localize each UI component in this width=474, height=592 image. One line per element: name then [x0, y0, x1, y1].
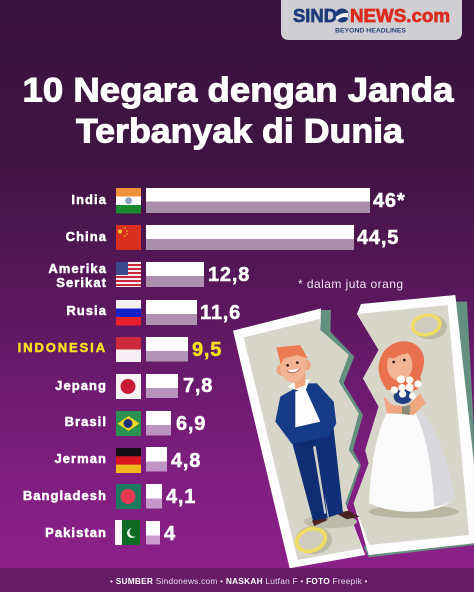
groom: [275, 345, 360, 528]
row: Amerika Serikat: Serikat: [56, 275, 107, 290]
row: Pakistan: 4: [164, 523, 176, 545]
bride: [369, 341, 459, 518]
footer credits: • SUMBER Sindonews.com • NASKAH Lutfan F • FOTO Freepik •: [110, 576, 368, 586]
flag: Russia: [116, 300, 141, 326]
row: China: [66, 225, 399, 250]
row: China: China: [66, 229, 107, 244]
footer band: [0, 568, 474, 592]
flag: Japan: [116, 374, 141, 399]
ring: top right: [409, 311, 447, 339]
row: Brasil: 6,9: [176, 413, 206, 435]
row: Jepang: Jepang: [55, 378, 107, 393]
left photo shadow: [320, 310, 363, 523]
flag: USA: [116, 262, 141, 287]
row: India: [71, 188, 405, 214]
row: Bangladesh: 4,1: [166, 486, 196, 508]
row: Jerman: 4,8: [171, 450, 201, 472]
ring: bottom left: [291, 522, 332, 558]
flag: Brazil: [116, 411, 141, 436]
flag: Pakistan: [115, 520, 140, 545]
flag: Indonesia: [116, 337, 141, 362]
row: Indonesia: 9,5: [192, 339, 222, 361]
row: Jerman: [54, 447, 201, 473]
row: Jerman: Jerman: [54, 451, 107, 466]
title: 10 Negara dengan Janda: [22, 72, 455, 110]
row: Jepang: 7,8: [183, 375, 213, 397]
row: India: India: [71, 192, 107, 207]
row: Rusia: [66, 300, 241, 326]
flag: India: [116, 188, 141, 214]
row: Bangladesh: Bangladesh: [23, 488, 107, 503]
row: Brasil: Brasil: [65, 414, 107, 429]
logo text: NEWS.com: [350, 5, 450, 26]
logo plate: [281, 0, 462, 40]
flag: Bangladesh: [116, 484, 141, 509]
logo text: BEYOND HEADLINES: [335, 28, 406, 34]
logo text: SIND: [293, 5, 337, 26]
row: Amerika Serikat: Amerika: [48, 261, 107, 276]
row: Bangladesh: [23, 484, 196, 509]
right photo shadow: [364, 302, 474, 557]
row: Amerika Serikat: 12,8: [208, 264, 250, 286]
row: Indonesia: INDONESIA: [18, 340, 107, 355]
title: Terbanyak di Dunia: [76, 112, 404, 150]
right photo: [354, 295, 474, 555]
row: Brasil: [65, 411, 206, 436]
illustration: torn wedding photo: [233, 295, 474, 568]
row: China: 44,5: [357, 227, 399, 249]
flag: China: [116, 225, 141, 250]
title: [22, 72, 455, 150]
note: unit: * dalam juta orang: [298, 277, 404, 291]
flag: Germany: [116, 448, 141, 473]
row: Rusia: Rusia: [66, 303, 107, 318]
row: Jepang: [55, 374, 213, 399]
left photo: [233, 308, 365, 568]
row: Pakistan: [45, 520, 176, 545]
logo text: [293, 5, 450, 34]
row: Amerika Serikat: [48, 261, 250, 290]
row: Indonesia: [18, 337, 222, 362]
row: Rusia: 11,6: [200, 302, 241, 324]
row: India: 46*: [373, 190, 405, 212]
row: Pakistan: Pakistan: [45, 525, 107, 540]
